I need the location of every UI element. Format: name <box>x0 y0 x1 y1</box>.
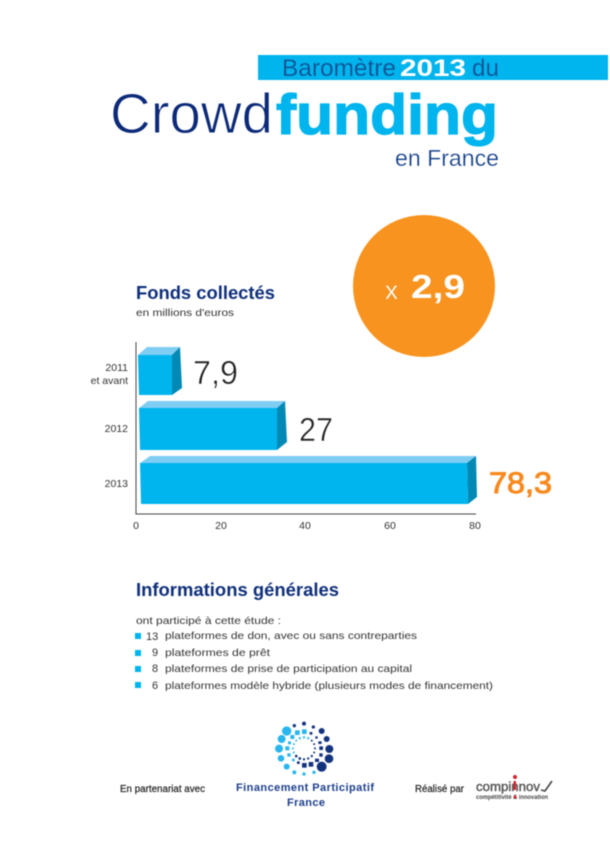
axis tick labels <box>133 520 481 532</box>
callout: x 2,9: x <box>385 275 398 305</box>
logo: compinnov: compinnov <box>476 779 541 794</box>
value: 78,3: 78,3 <box>489 467 552 500</box>
list item: 9 <box>135 647 270 659</box>
category labels: 2013 <box>105 478 128 490</box>
logo: compinnov: compétitivité & innovation <box>476 795 548 801</box>
author label: Réalisé par <box>415 784 465 795</box>
list item: 13: 13 <box>146 631 158 643</box>
axis tick labels: 0 <box>133 520 139 532</box>
list item: 6: plateformes modèle hybride (plusieurs modes de financement) <box>165 680 493 692</box>
list item: 6: 6 <box>152 680 158 692</box>
callout: x 2,9 <box>353 215 495 357</box>
header: barometer banner <box>258 55 608 82</box>
logo: compinnov <box>476 775 552 801</box>
header: barometer banner: Baromètre <box>282 55 396 82</box>
axis tick labels: 20 <box>215 520 227 532</box>
bar: 2013 <box>140 456 477 504</box>
partner name: Financement Participatif France: Financement Participatif <box>236 782 374 794</box>
partner name: Financement Participatif France <box>236 782 374 809</box>
header: barometer banner: du <box>472 55 499 82</box>
list item: 9: 9 <box>152 647 158 659</box>
heading: Informations générales: Informations générales <box>136 580 339 600</box>
intro line: ont participé à cette étude : <box>136 615 281 627</box>
value: 27: 27 <box>299 411 333 448</box>
callout: x 2,9: 2,9 <box>411 268 465 305</box>
chart axes <box>136 342 476 514</box>
list item: 8: plateformes de prise de participation au capital <box>165 663 412 675</box>
bar chart <box>91 342 552 532</box>
title: Crowdfunding: funding <box>276 83 498 147</box>
list item: 8: 8 <box>152 663 158 675</box>
title: Crowdfunding <box>110 82 498 147</box>
chart unit note: en millions d'euros <box>136 307 234 319</box>
header: barometer banner: 2013 <box>400 55 466 82</box>
axis tick labels: 80 <box>469 520 481 532</box>
bar: 2011 et avant <box>138 347 182 395</box>
heading: Fonds collectés: Fonds collectés <box>136 283 275 303</box>
text block: general information <box>135 615 493 692</box>
partner name: Financement Participatif France: France <box>287 797 325 809</box>
list item: 9: plateformes de prêt <box>165 647 270 659</box>
category labels: 2012 <box>105 423 128 435</box>
bar: 2012 <box>139 401 287 450</box>
category labels <box>91 362 128 490</box>
list item: 13: plateformes de don, avec ou sans contreparties <box>165 630 417 642</box>
icon: Financement Participatif logo <box>275 722 333 775</box>
category labels: 2011 <box>105 362 128 374</box>
axis tick labels: 60 <box>384 520 396 532</box>
title: Crowdfunding: Crowd <box>110 82 273 146</box>
axis tick labels: 40 <box>299 520 311 532</box>
subtitle: en France: en France <box>395 145 499 171</box>
category labels: et avant <box>91 375 128 387</box>
value: 7,9: 7,9 <box>193 354 238 391</box>
partner label: En partenariat avec <box>120 784 205 795</box>
